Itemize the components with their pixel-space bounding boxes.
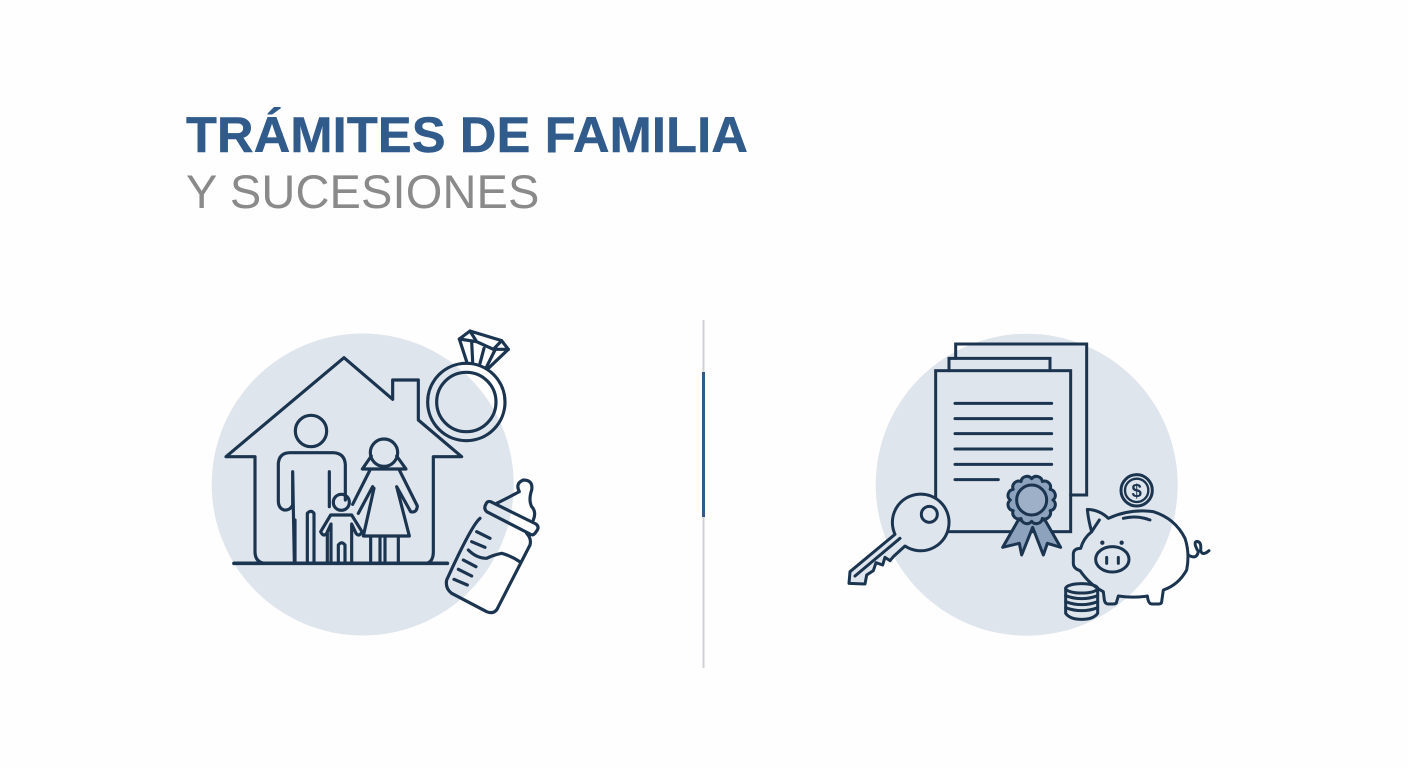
subtitle: Y SUCESIONES: [186, 165, 540, 218]
icon: dollar coin: [1121, 475, 1152, 506]
icon: key: [849, 494, 949, 584]
icon: father: [278, 415, 345, 562]
icon: child: [321, 494, 362, 562]
divider: [702, 320, 705, 668]
icon: baby bottle: [446, 480, 538, 613]
icon: ring: [428, 331, 508, 441]
icon: coin stack: [1066, 584, 1098, 619]
icon: stacked documents: [936, 344, 1087, 532]
icon: mother: [353, 439, 417, 562]
background circle: family: [212, 334, 514, 636]
title: TRÁMITES DE FAMILIA: [186, 106, 748, 163]
icon: dollar coin: $: [1131, 480, 1142, 501]
icon: piggy bank: [1073, 509, 1209, 604]
panel: family: [212, 331, 538, 636]
background circle: inheritance: [876, 334, 1178, 636]
icon: house: [226, 358, 462, 563]
icon: seal with ribbon: [1003, 476, 1061, 555]
panel: inheritance: [849, 334, 1209, 636]
